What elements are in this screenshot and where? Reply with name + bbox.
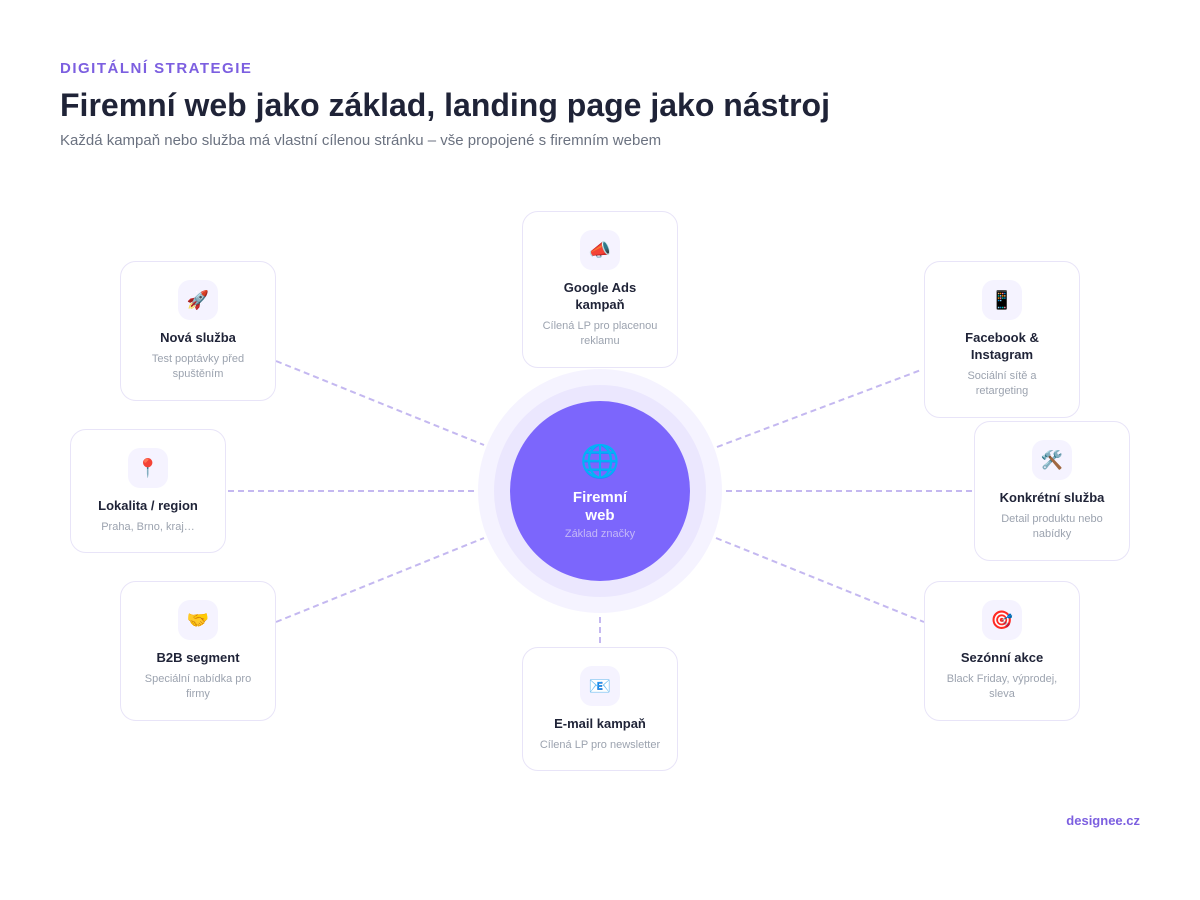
icon: globe: 🌐 — [580, 443, 620, 479]
icon: tools: 🛠️ — [1041, 450, 1063, 470]
card description: Black Friday, výprodej, sleva — [947, 673, 1057, 700]
icon: rocket — [178, 280, 218, 320]
card title: E-mail kampaň — [554, 716, 646, 731]
icon: handshake: 🤝 — [187, 610, 209, 630]
icon: e-mail — [580, 666, 620, 706]
card title: B2B segment — [156, 650, 240, 665]
card title: Sezónní akce — [961, 650, 1043, 665]
panel: Nová služba — [120, 261, 276, 401]
panel: B2B segment — [120, 581, 276, 721]
title: Firemní web jako základ, landing page jako nástroj — [60, 87, 830, 123]
icon: target — [982, 600, 1022, 640]
panel: Google Ads kampaň — [522, 211, 678, 368]
icon: pin — [128, 448, 168, 488]
icon: e-mail: 📧 — [589, 676, 611, 696]
card title: Lokalita / region — [98, 498, 198, 513]
hub circle — [510, 401, 690, 581]
panel: Facebook & Instagram — [924, 261, 1080, 418]
card description: Praha, Brno, kraj… — [101, 521, 195, 533]
card description: Cílená LP pro newsletter — [540, 739, 660, 751]
panel: Sezónní akce — [924, 581, 1080, 721]
hub subtitle: Základ značky — [565, 528, 635, 540]
icon: tools — [1032, 440, 1072, 480]
middle ring — [494, 385, 706, 597]
panel: Lokalita / region — [70, 429, 226, 553]
card description: Detail produktu nebo nabídky — [1001, 513, 1103, 540]
panel: E-mail kampaň — [522, 647, 678, 771]
icon: handshake — [178, 600, 218, 640]
center hub: Firemní web — [478, 369, 722, 613]
icon: megaphone — [580, 230, 620, 270]
card title: Facebook & Instagram — [965, 330, 1039, 362]
hub title — [573, 489, 628, 524]
icon: pin: 📍 — [137, 458, 159, 478]
hub title: web — [585, 507, 615, 524]
subtitle: Každá kampaň nebo služba má vlastní cílenou stránku – vše propojené s firemním webem — [60, 132, 661, 149]
icon: megaphone: 📣 — [589, 240, 611, 260]
eyebrow label: DIGITÁLNÍ STRATEGIE — [60, 60, 252, 77]
card title: Nová služba — [160, 330, 236, 345]
panel: Konkrétní služba — [974, 421, 1130, 561]
card description: Speciální nabídka pro firmy — [145, 673, 251, 700]
icon: phone: 📱 — [991, 290, 1013, 310]
card description: Sociální sítě a retargeting — [967, 370, 1037, 397]
footer brand: designee.cz — [1066, 813, 1140, 828]
icon: phone — [982, 280, 1022, 320]
card title: Google Ads kampaň — [564, 280, 636, 312]
icon: target: 🎯 — [991, 610, 1013, 630]
card description: Test poptávky před spuštěním — [152, 353, 244, 380]
hub title: Firemní — [573, 489, 627, 506]
card description: Cílená LP pro placenou reklamu — [543, 320, 657, 347]
icon: rocket: 🚀 — [187, 290, 209, 310]
card title: Konkrétní služba — [1000, 490, 1104, 505]
